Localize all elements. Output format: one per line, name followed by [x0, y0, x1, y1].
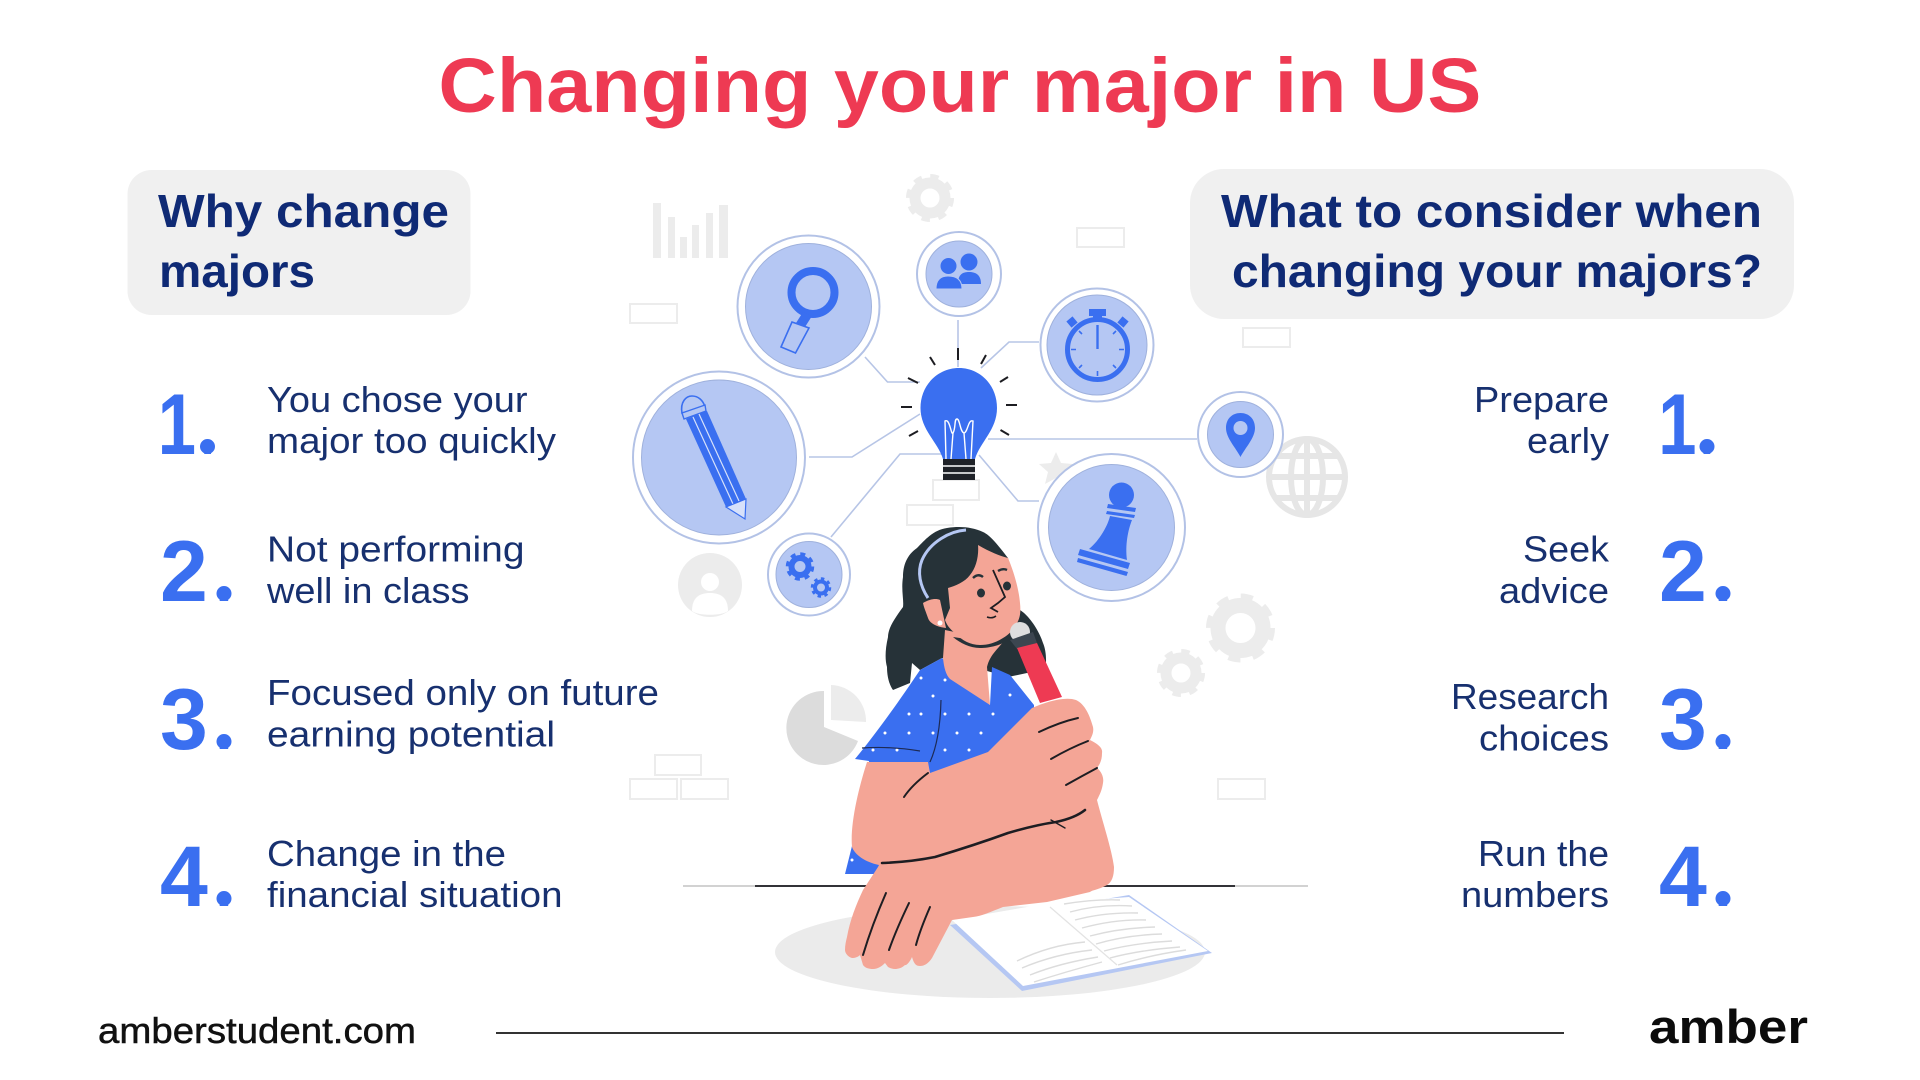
- consideration 3: 3: [1659, 672, 1707, 768]
- panel: what to consider heading: What to consider when: [1221, 185, 1762, 237]
- reason 3: earning potential: [267, 714, 555, 754]
- icon: faded user avatar: [678, 553, 742, 617]
- icon: faded gear top: [908, 176, 952, 220]
- reason 2: .: [216, 547, 232, 614]
- panel: why change majors heading: [128, 170, 470, 315]
- consideration 1: 1: [1658, 377, 1697, 473]
- reason 2: well in class: [266, 570, 470, 611]
- panel: why change majors heading: Why change: [158, 185, 449, 237]
- consideration 2: advice: [1499, 570, 1609, 611]
- consideration 3: [1451, 672, 1731, 768]
- illustration: student: [845, 527, 1114, 969]
- earring: [938, 620, 942, 626]
- consideration 1: .: [1700, 400, 1714, 467]
- reason 4: 4: [160, 829, 208, 925]
- desk line: [683, 885, 1308, 887]
- panel: what to consider heading: [1190, 169, 1794, 319]
- icon: stopwatch bubble: [1040, 288, 1154, 402]
- icon: gears bubble: [768, 534, 850, 616]
- connector lines to lightbulb: [809, 320, 1197, 537]
- face: [945, 545, 1020, 645]
- faded note boxes: [630, 228, 1290, 799]
- consideration 2: 2: [1659, 524, 1707, 620]
- consideration 1: Prepare: [1474, 379, 1609, 420]
- light rays: [901, 348, 1017, 436]
- consideration 2: .: [1715, 547, 1731, 614]
- footer website: amberstudent.com: [98, 1010, 416, 1051]
- neck shadow: [953, 636, 1007, 648]
- bulb glass: [920, 368, 997, 459]
- reason 3: Focused only on future: [267, 672, 659, 713]
- red pen: [1010, 622, 1062, 703]
- icon: faded bar chart: [653, 203, 728, 258]
- icon: faded star: [1039, 452, 1073, 484]
- icon: chess pawn bubble: [1038, 454, 1185, 601]
- icon: pencil bubble: [633, 372, 805, 544]
- consideration 3: choices: [1479, 718, 1609, 758]
- headband: [920, 530, 966, 598]
- consideration 4: [1461, 829, 1731, 925]
- consideration 4: .: [1715, 852, 1731, 919]
- reason 4: [160, 829, 562, 925]
- arms and hands: [845, 699, 1114, 969]
- desk shadow: [775, 906, 1205, 998]
- faded background pictograms: [630, 176, 1345, 799]
- consideration 4: Run the: [1478, 833, 1609, 874]
- icon: people bubble: [917, 232, 1001, 316]
- facial features: [973, 569, 1011, 618]
- reason 3: .: [216, 695, 232, 762]
- footer divider: [496, 1032, 1564, 1034]
- shirt dots: [850, 676, 1012, 862]
- reason 1: major too quickly: [267, 420, 556, 461]
- reason 2: [160, 524, 524, 620]
- panel: what to consider heading: changing your majors?: [1232, 245, 1762, 297]
- reason 2: Not performing: [267, 528, 524, 570]
- icon: faded large gear: [1210, 597, 1272, 659]
- title: Changing your major in US: [438, 43, 1481, 129]
- neck: [943, 630, 1003, 705]
- icon: magnifier bubble: [738, 236, 880, 378]
- back hair: [886, 527, 1046, 690]
- reason 4: .: [216, 852, 232, 919]
- consideration 4: 4: [1659, 829, 1707, 925]
- consideration 4: numbers: [1461, 874, 1609, 915]
- reason 2: 2: [160, 524, 208, 620]
- consideration 1: early: [1527, 420, 1609, 461]
- reason 1: [158, 377, 556, 473]
- consideration 3: .: [1715, 695, 1731, 762]
- reason 3: 3: [160, 672, 208, 768]
- consideration 2: Seek: [1523, 528, 1610, 570]
- reason 1: .: [201, 400, 214, 467]
- illustration: open book: [950, 895, 1212, 991]
- icon: faded globe: [1269, 439, 1345, 515]
- icon: faded pie chart: [786, 685, 866, 765]
- arm and finger creases: [863, 718, 1097, 955]
- list: things to consider: [1451, 377, 1731, 925]
- reason 3: [160, 672, 659, 768]
- ear: [923, 599, 946, 628]
- panel: why change majors heading: majors: [159, 245, 315, 297]
- filament: [945, 419, 973, 459]
- icon: lightbulb: [901, 348, 1017, 480]
- socket: [943, 459, 975, 480]
- reason 4: financial situation: [267, 874, 562, 915]
- reason 1: You chose your: [267, 379, 528, 420]
- footer logo: amber: [1649, 1000, 1808, 1053]
- icon: location pin bubble: [1198, 392, 1283, 477]
- consideration 3: Research: [1451, 676, 1609, 717]
- consideration 2: [1499, 524, 1731, 620]
- icon: faded small gear: [1160, 652, 1202, 694]
- list: reasons to change majors: [158, 377, 659, 925]
- reason 1: 1: [158, 377, 196, 473]
- shirt: [845, 658, 1034, 874]
- reason 4: Change in the: [267, 833, 506, 874]
- consideration 1: [1474, 377, 1714, 473]
